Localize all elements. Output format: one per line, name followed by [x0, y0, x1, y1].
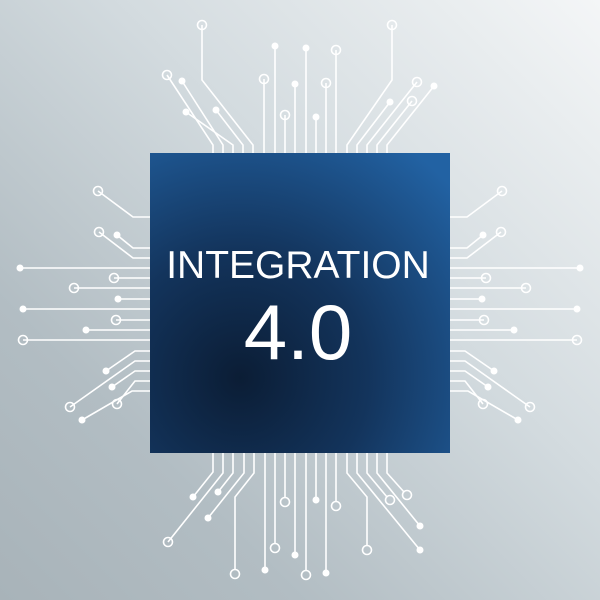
traces: bottom: [164, 453, 424, 580]
traces: left: [16, 186, 150, 424]
title: 4.0: 4.0: [244, 288, 352, 376]
chip: [150, 153, 450, 453]
traces: right: [450, 186, 584, 424]
traces: top: [162, 20, 438, 153]
title: INTEGRATION: INTEGRATION: [166, 244, 430, 287]
